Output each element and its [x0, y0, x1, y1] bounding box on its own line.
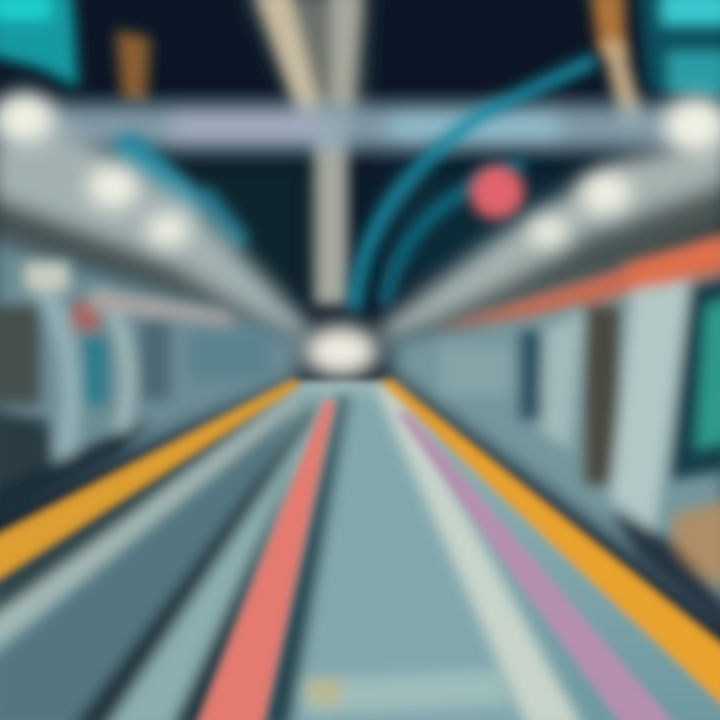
- ceiling beams: [0, 125, 720, 345]
- floor bands: [0, 385, 300, 640]
- ceiling upper glow: [120, 160, 580, 290]
- left train: [0, 235, 300, 530]
- central hanging column: [248, 0, 365, 120]
- yellow stripe left: [0, 378, 300, 585]
- horizontal light band: [0, 104, 720, 150]
- right train: [390, 232, 720, 640]
- red light: [470, 165, 524, 219]
- teal corner panels: [0, 0, 720, 105]
- ceiling lamps: [0, 92, 720, 248]
- teal cables: [130, 62, 590, 305]
- pink stripe right: [395, 410, 680, 720]
- central vanishing-point glow: [303, 325, 379, 377]
- yellow stripe right: [378, 380, 720, 712]
- red stripe centre: [195, 400, 335, 720]
- orange hanging accents: [116, 0, 626, 102]
- floor: [0, 382, 720, 720]
- floor stripes: [0, 378, 720, 720]
